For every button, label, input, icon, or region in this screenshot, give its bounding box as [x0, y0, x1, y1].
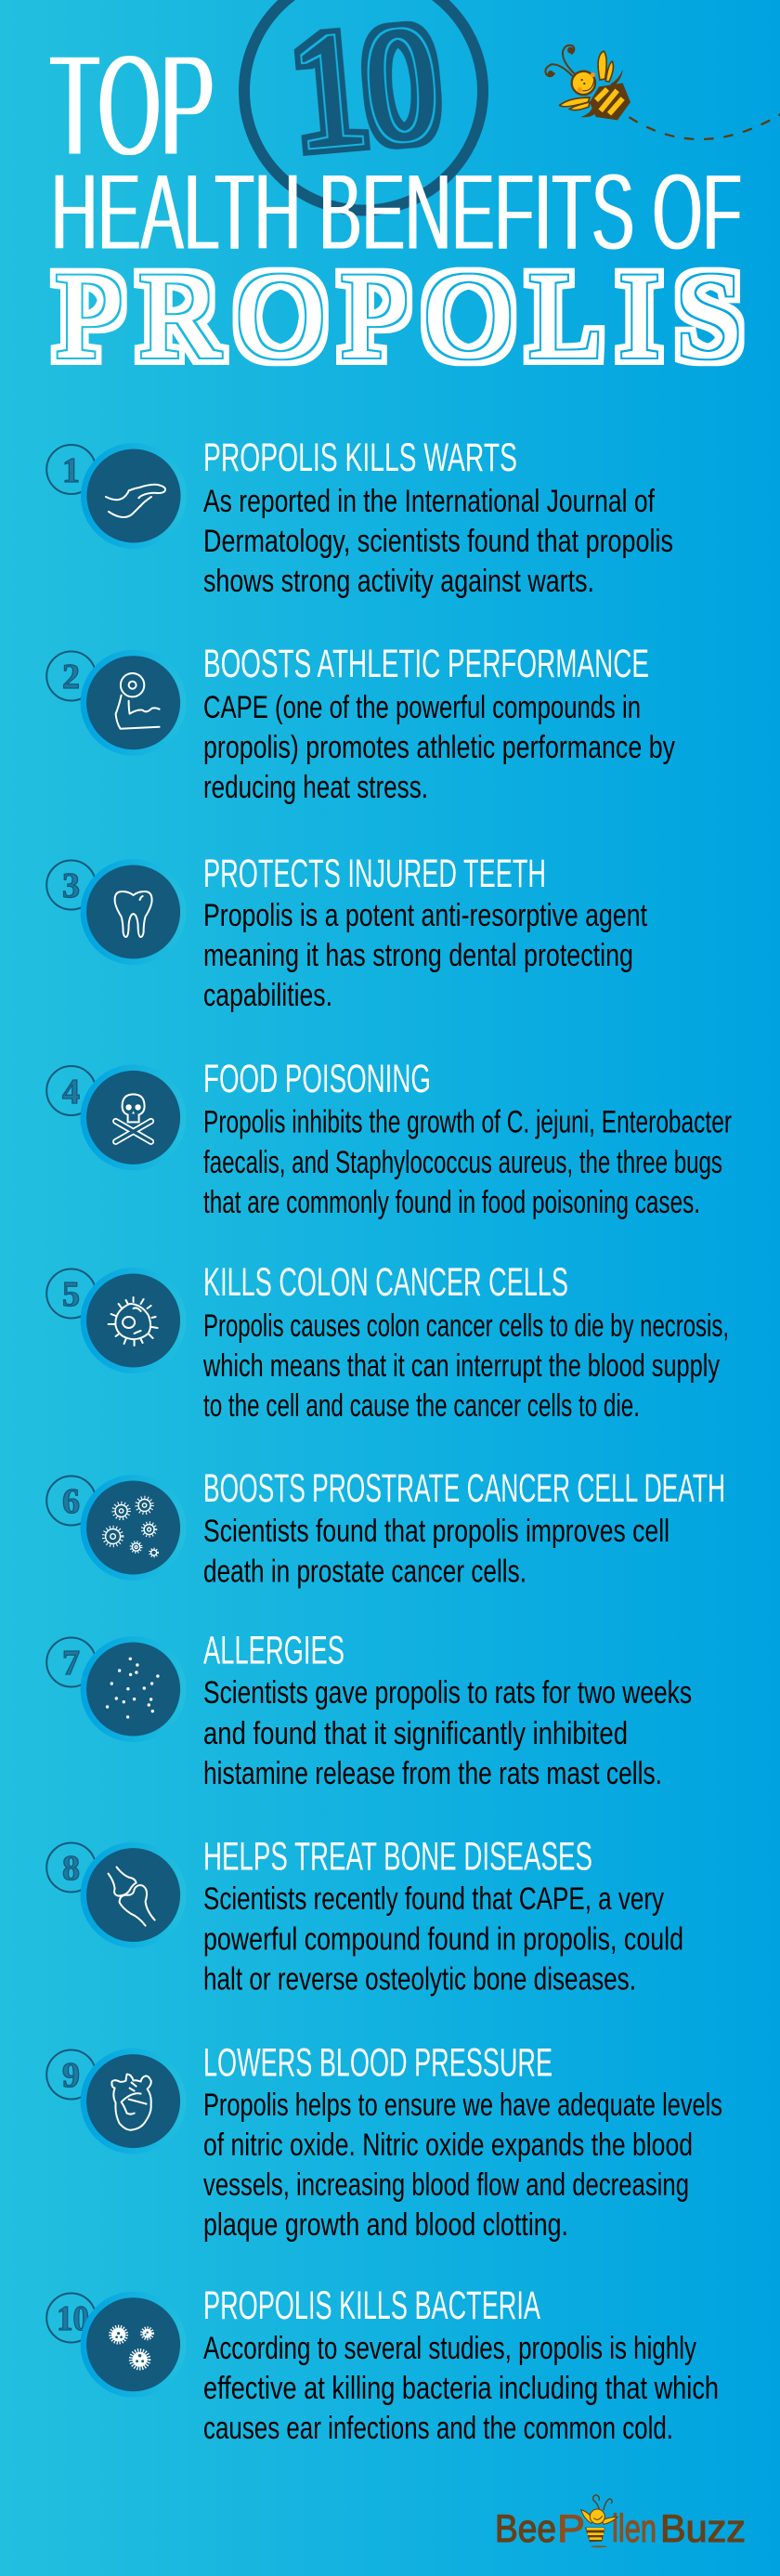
number badge 2: 2 — [62, 657, 80, 696]
number badge 5 — [46, 1268, 96, 1319]
number badge 10: 10 — [57, 2299, 89, 2338]
icon: cell cluster — [81, 1475, 187, 1581]
body text: As reported in the International Journal of — [203, 484, 655, 519]
body text — [203, 2331, 719, 2446]
number badge 6: 6 — [62, 1482, 80, 1521]
panel: benefit 4 — [46, 1057, 732, 1220]
body text: CAPE (one of the powerful compounds in — [203, 690, 641, 725]
body text: Propolis is a potent anti-resorptive agent — [203, 898, 647, 933]
body text: and found that it significantly inhibited — [203, 1716, 628, 1751]
body text — [203, 1675, 692, 1791]
body text: Dermatology, scientists found that propolis — [203, 524, 673, 559]
body text — [203, 690, 675, 805]
number badge 3: 3 — [62, 866, 80, 905]
number badge 8 — [46, 1842, 96, 1893]
panel: benefit 7 — [46, 1629, 692, 1791]
body text — [203, 484, 673, 599]
number badge 6 — [46, 1477, 96, 1525]
heading: KILLS COLON CANCER CELLS — [203, 1260, 568, 1305]
body text: reducing heat stress. — [203, 770, 428, 805]
header — [50, 0, 780, 384]
body text — [203, 1514, 670, 1590]
icon: flying bee — [545, 46, 780, 139]
heading: PROPOLIS KILLS WARTS — [203, 436, 517, 480]
heading: PROTECTS INJURED TEETH — [203, 852, 546, 896]
icon: bacteria — [81, 2292, 187, 2398]
body text — [203, 1881, 683, 1997]
number badge 10 — [46, 2294, 96, 2342]
title: propolis: PROPOLIS — [55, 247, 759, 384]
number badge 8: 8 — [62, 1849, 80, 1888]
icon: bone joint — [81, 1842, 187, 1948]
logo: Bee Pollen Buzz: Bee — [495, 2506, 556, 2550]
icon: cancer cell — [81, 1268, 187, 1373]
body text — [203, 898, 647, 1013]
panel: benefit 5 — [46, 1260, 729, 1424]
body text: death in prostate cancer cells. — [203, 1555, 526, 1590]
heading: ALLERGIES — [203, 1629, 344, 1673]
body text: plaque growth and blood clotting. — [203, 2207, 568, 2243]
panel: benefit 6 — [46, 1466, 725, 1590]
number badge 5: 5 — [62, 1275, 80, 1314]
icon: logo bee — [581, 2495, 618, 2547]
logo: Bee Pollen Buzz — [495, 2495, 746, 2550]
panel: benefit 1 — [46, 436, 673, 599]
body text — [203, 2088, 722, 2243]
number badge 9 — [46, 2050, 96, 2099]
number badge 1 — [46, 445, 96, 494]
logo: Bee Pollen Buzz: Buzz — [660, 2506, 746, 2550]
body text: halt or reverse osteolytic bone diseases. — [203, 1961, 636, 1997]
icon: heart — [81, 2049, 187, 2154]
number badge 9: 9 — [62, 2056, 80, 2095]
number badge 2 — [46, 652, 96, 700]
heading: PROPOLIS KILLS BACTERIA — [203, 2283, 540, 2328]
panel: benefit 9 — [46, 2041, 722, 2243]
body text: meaning it has strong dental protecting — [203, 938, 633, 973]
body text: capabilities. — [203, 978, 332, 1013]
panel: benefit 10 — [46, 2283, 719, 2446]
icon: skull and crossbones — [81, 1064, 187, 1170]
body text: shows strong activity against warts. — [203, 564, 594, 599]
stamp circle around 10 — [244, 0, 483, 210]
heading: FOOD POISONING — [203, 1057, 431, 1101]
icon: histamine dots — [81, 1636, 187, 1742]
number badge 3 — [46, 860, 96, 910]
icon: arm with dumbbell — [81, 650, 187, 756]
icon: tooth — [81, 859, 187, 965]
number badge 7 — [46, 1638, 96, 1686]
number badge 4: 4 — [62, 1073, 80, 1112]
heading: LOWERS BLOOD PRESSURE — [203, 2041, 552, 2086]
panel: benefit 2 — [46, 642, 675, 805]
panel: benefit 3 — [46, 852, 647, 1013]
body text — [202, 1308, 729, 1424]
title: top: TOP — [50, 24, 214, 188]
panel: benefit 8 — [46, 1835, 683, 1997]
number badge 1: 1 — [62, 451, 80, 490]
icon: hand — [81, 443, 187, 549]
body text: histamine release from the rats mast cells. — [203, 1756, 662, 1791]
number badge 4 — [46, 1066, 96, 1115]
logo: Bee Pollen Buzz: P — [557, 2506, 585, 2550]
body text — [203, 1105, 732, 1220]
number badge 7: 7 — [62, 1644, 80, 1683]
logo: Bee Pollen Buzz: llen — [612, 2506, 656, 2550]
